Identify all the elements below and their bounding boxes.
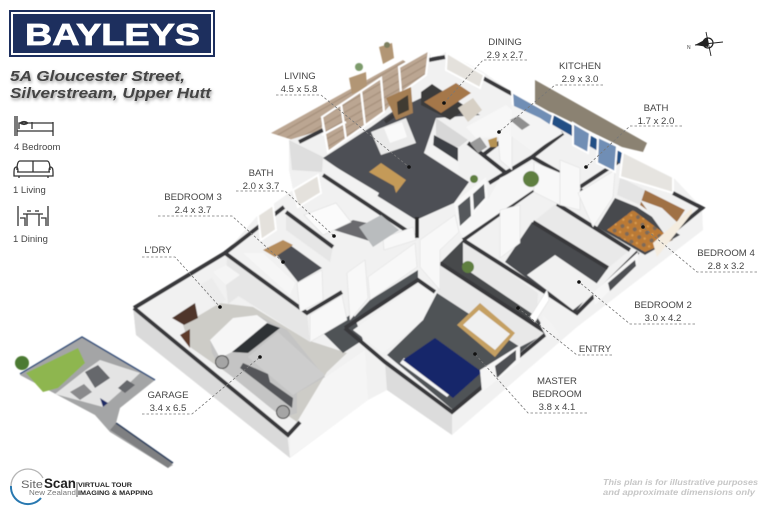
wall face: hall north xyxy=(463,240,538,317)
label: living: 4.5 x 5.8 xyxy=(281,84,317,95)
wall face: bath south xyxy=(286,212,333,262)
icon: north compass xyxy=(687,32,723,56)
deck seen between windows xyxy=(381,67,401,112)
bed: bedroom 4 xyxy=(607,190,685,252)
wall caps xyxy=(134,57,702,435)
house body xyxy=(133,50,703,458)
label: kitchen: KITCHEN xyxy=(559,61,601,72)
balcony wall xyxy=(289,140,323,172)
label: bath east xyxy=(584,103,682,169)
steps: entry xyxy=(540,315,560,340)
label: garage: GARAGE xyxy=(147,390,189,401)
address heading: 5A Gloucester Street, xyxy=(11,71,186,87)
floor: entry hall xyxy=(440,240,547,333)
label: garage: 3.4 x 6.5 xyxy=(150,403,186,414)
bed: bedroom 3 xyxy=(243,253,295,295)
label: kitchen: 2.9 x 3.0 xyxy=(562,74,598,85)
living door xyxy=(454,177,488,230)
site base xyxy=(20,337,173,468)
kitchen back wall xyxy=(535,80,647,164)
room count: living: 1 Living xyxy=(13,185,46,196)
wall face: master north xyxy=(437,265,547,347)
label: entry xyxy=(516,306,612,355)
icon: sofa xyxy=(14,161,53,178)
label: bath west: 2.0 x 3.7 xyxy=(243,181,279,192)
dining table and chairs xyxy=(421,83,482,122)
icon: bed xyxy=(15,116,53,136)
column: pipe xyxy=(415,217,419,238)
room count: bedroom xyxy=(14,116,61,153)
label: master bedroom: BEDROOM xyxy=(532,389,582,400)
room count: bedroom: 4 Bedroom xyxy=(14,142,61,153)
label: bedroom 2 xyxy=(577,280,695,324)
floor: bedroom 2 xyxy=(505,222,608,313)
tree xyxy=(15,356,29,370)
label: living xyxy=(276,71,411,169)
logo: SiteScan: Scan xyxy=(44,476,76,491)
label: laundry xyxy=(142,245,222,309)
windows: dining, bath and bedroom 3 xyxy=(258,53,484,240)
outer wall: garage east xyxy=(290,350,368,457)
TV wall xyxy=(436,118,468,147)
lawn xyxy=(26,348,85,392)
window: master xyxy=(480,345,520,392)
address heading: Silverstream, Upper Hutt xyxy=(11,88,213,104)
wall face: bedroom 3 south xyxy=(226,253,310,342)
room count: dining xyxy=(13,206,48,245)
logo: Bayleys: BAYLEYS xyxy=(25,17,200,52)
label: garage xyxy=(142,355,262,414)
disclaimer: and approximate dimensions only xyxy=(603,487,755,497)
label: dining: 2.9 x 2.7 xyxy=(487,50,523,61)
logo: SiteScan: Site xyxy=(21,479,43,491)
logo: SiteScan: IMAGING & MAPPING xyxy=(78,491,153,497)
site plan thumbnail xyxy=(15,337,173,468)
label: bedroom 4: 2.8 x 3.2 xyxy=(708,261,744,272)
wall face: bedroom 2 north xyxy=(533,203,630,268)
windows xyxy=(322,50,429,152)
label: master bedroom: 3.8 x 4.1 xyxy=(539,402,575,413)
window: bedroom 2 xyxy=(593,252,638,305)
kitchen counter xyxy=(510,105,563,152)
label: master bedroom xyxy=(473,352,587,413)
label: dining xyxy=(442,37,527,105)
wall face: bedroom 4 back xyxy=(617,177,645,205)
label: bath east: 1.7 x 2.0 xyxy=(638,116,674,127)
window: bedroom 4 back xyxy=(620,152,673,193)
armchair xyxy=(371,118,416,155)
disclaimer: This plan is for illustrative purposes xyxy=(603,477,758,487)
TV unit xyxy=(424,135,459,173)
planter boxes xyxy=(349,42,394,94)
icon: north compass: N xyxy=(687,45,691,51)
label: bedroom 2: 3.0 x 4.2 xyxy=(645,313,681,324)
label: kitchen xyxy=(497,61,603,134)
icon: dining table xyxy=(18,206,48,226)
coffee table xyxy=(369,163,406,193)
label: dining: DINING xyxy=(488,37,522,48)
label: bath west: BATH xyxy=(249,168,274,179)
floor: bedroom 4 xyxy=(597,198,680,255)
label: bedroom 2: BEDROOM 2 xyxy=(634,300,692,311)
label: bedroom 3 xyxy=(158,192,285,264)
shower glass xyxy=(359,215,399,247)
disclaimer xyxy=(603,477,758,497)
outer wall: master south-west xyxy=(385,362,452,435)
kitchen windows xyxy=(512,92,617,172)
bath tub xyxy=(304,203,351,235)
car xyxy=(210,315,325,418)
label: bedroom 3: 2.4 x 3.7 xyxy=(175,205,211,216)
floor: hall by garage xyxy=(323,313,363,353)
floor plan: 3D cutaway xyxy=(133,42,703,458)
floor: central corridor xyxy=(345,270,418,327)
deck xyxy=(271,60,411,142)
master sofa xyxy=(457,303,515,357)
bed: bedroom 2 xyxy=(527,255,602,310)
closet: master xyxy=(353,285,435,353)
logo: SiteScan: New Zealand xyxy=(29,488,76,497)
white wall south of living xyxy=(459,162,533,238)
wood cabinet xyxy=(386,87,413,120)
label: living: LIVING xyxy=(284,71,316,82)
room count: dining: 1 Dining xyxy=(13,234,48,245)
driveway xyxy=(110,423,173,468)
label: bedroom 3: BEDROOM 3 xyxy=(164,192,222,203)
label: bedroom 4 xyxy=(641,225,757,272)
label: entry: ENTRY xyxy=(579,344,612,355)
driveway edge xyxy=(116,423,173,463)
room count: living xyxy=(13,161,53,196)
logo: Bayleys xyxy=(9,10,215,57)
window: bedroom 4 xyxy=(653,208,692,257)
master bed xyxy=(400,338,482,398)
plants xyxy=(462,171,539,273)
floor: living and dining xyxy=(323,88,480,220)
floor: bath xyxy=(334,220,399,243)
logo: SiteScan: VIRTUAL TOUR xyxy=(78,483,133,489)
floor: bedroom 3 xyxy=(275,245,322,282)
floor: master xyxy=(387,293,543,410)
label: bath west xyxy=(236,168,336,238)
label: master bedroom: MASTER xyxy=(537,376,577,387)
site boundary xyxy=(20,337,155,380)
label: bedroom 4: BEDROOM 4 xyxy=(697,248,755,259)
label: bath east: BATH xyxy=(644,103,669,114)
laundry appliances xyxy=(172,265,240,348)
logo: SiteScan xyxy=(11,469,153,504)
sofa xyxy=(323,160,379,203)
address heading: Silverstream, Upper Hutt xyxy=(10,86,212,102)
house miniature xyxy=(55,360,140,407)
door blocks xyxy=(297,127,615,342)
entry door xyxy=(530,290,549,322)
kitchen sink xyxy=(470,116,530,153)
label: laundry: L'DRY xyxy=(144,245,172,256)
outer wall: garage south-west xyxy=(133,307,290,458)
kitchen island xyxy=(466,105,512,138)
address heading: 5A Gloucester Street, xyxy=(10,69,185,85)
wooden desk: bedroom 3 xyxy=(263,240,293,257)
address heading xyxy=(10,69,213,104)
floor: garage xyxy=(183,303,347,422)
